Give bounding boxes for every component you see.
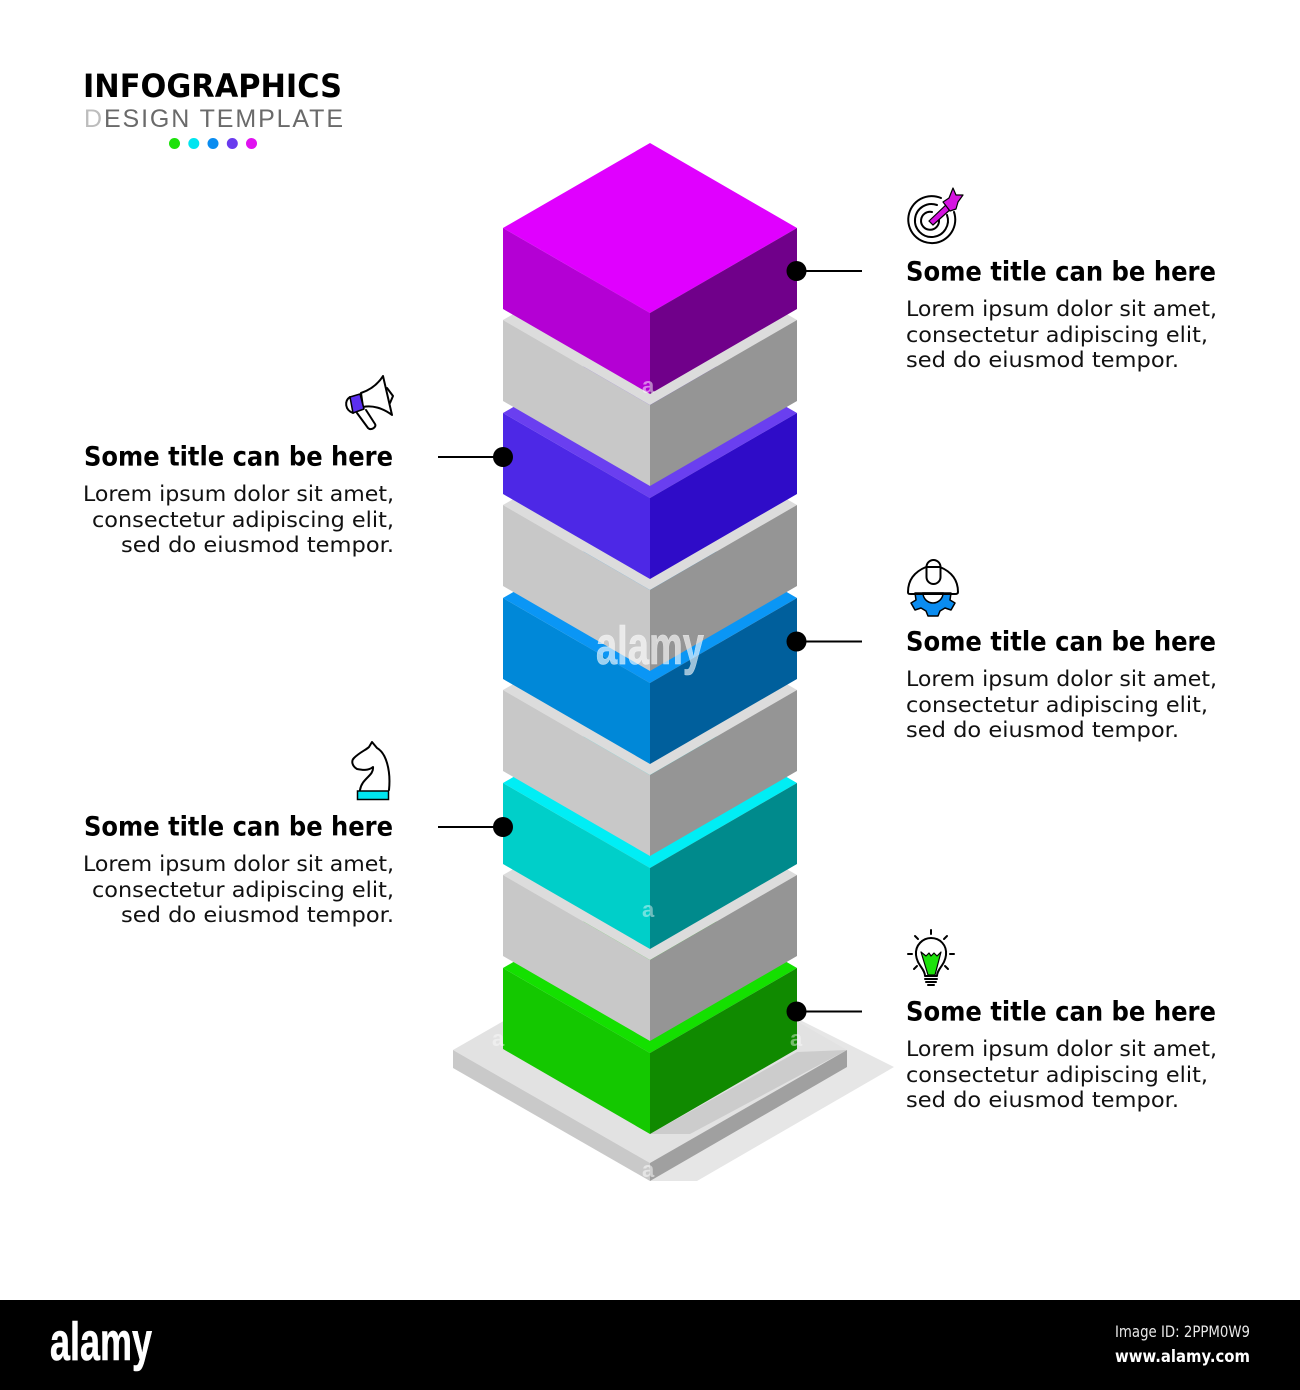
block: grey 3 bbox=[503, 605, 797, 856]
block: magenta bbox=[503, 143, 797, 394]
icon: megaphone bbox=[346, 376, 393, 429]
block: grey 2 bbox=[503, 420, 797, 671]
watermark: a bbox=[642, 373, 655, 398]
heading: infographics design template: INFOGRAPHICS bbox=[83, 67, 342, 105]
watermark: a bbox=[642, 1157, 655, 1182]
connector: upper left bbox=[438, 447, 513, 467]
text block: upper left bbox=[83, 442, 394, 558]
watermark: alamy bbox=[596, 616, 704, 676]
watermark: a bbox=[642, 897, 655, 922]
text block: lower left bbox=[83, 812, 394, 928]
text block: top right bbox=[906, 256, 1217, 373]
watermark: a bbox=[790, 1026, 803, 1051]
text block: middle right: consectetur adipiscing elit, bbox=[906, 693, 1208, 718]
base plate bbox=[453, 937, 847, 1181]
connector: lower left bbox=[438, 817, 513, 837]
footer bar: www.alamy.com bbox=[1115, 1347, 1250, 1367]
text block: top right: Some title can be here bbox=[906, 256, 1216, 288]
icon: target bbox=[908, 188, 963, 243]
text block: bottom right: sed do eiusmod tempor. bbox=[906, 1088, 1179, 1113]
block: grey 4 bbox=[503, 790, 797, 1041]
footer bar: Image ID: 2PPM0W9 bbox=[1115, 1322, 1250, 1341]
text block: bottom right: Some title can be here bbox=[906, 996, 1216, 1028]
text block: middle right: Some title can be here bbox=[906, 626, 1216, 658]
text block: upper left: Lorem ipsum dolor sit amet, bbox=[83, 482, 394, 507]
block: blue bbox=[503, 513, 797, 764]
text block: middle right: sed do eiusmod tempor. bbox=[906, 718, 1179, 743]
icon: helmet with gear bbox=[908, 560, 958, 616]
connector: top right bbox=[786, 261, 862, 281]
text block: top right: sed do eiusmod tempor. bbox=[906, 348, 1179, 373]
text block: bottom right: consectetur adipiscing elit, bbox=[906, 1063, 1208, 1088]
block: teal bbox=[503, 698, 797, 949]
footer bar bbox=[0, 1300, 1300, 1390]
text block: bottom right: Lorem ipsum dolor sit amet, bbox=[906, 1037, 1217, 1062]
watermark: a bbox=[492, 1026, 505, 1051]
text block: lower left: Lorem ipsum dolor sit amet, bbox=[83, 852, 394, 877]
block: green bbox=[503, 883, 797, 1134]
text block: bottom right bbox=[906, 996, 1217, 1113]
icon: chess knight bbox=[352, 742, 389, 800]
isometric tower bbox=[453, 143, 894, 1181]
text block: upper left: Some title can be here bbox=[84, 442, 393, 472]
heading: infographics design template bbox=[83, 67, 343, 149]
text block: middle right bbox=[906, 626, 1217, 743]
icon: light bulb bbox=[908, 930, 954, 985]
text block: top right: consectetur adipiscing elit, bbox=[906, 323, 1208, 348]
text block: upper left: consectetur adipiscing elit, bbox=[92, 508, 394, 533]
text block: lower left: consectetur adipiscing elit, bbox=[92, 878, 394, 903]
text block: middle right: Lorem ipsum dolor sit amet, bbox=[906, 667, 1217, 692]
block: grey 1 bbox=[503, 235, 797, 486]
watermark bbox=[492, 373, 803, 1182]
text block: lower left: sed do eiusmod tempor. bbox=[121, 903, 394, 928]
connector: bottom right bbox=[786, 1002, 862, 1022]
ground shadow bbox=[650, 1020, 894, 1181]
connector: middle right bbox=[786, 632, 862, 652]
text block: upper left: sed do eiusmod tempor. bbox=[121, 533, 394, 558]
block: violet bbox=[503, 328, 797, 579]
footer bar: alamy bbox=[50, 1312, 152, 1372]
text block: lower left: Some title can be here bbox=[84, 812, 393, 842]
text block: top right: Lorem ipsum dolor sit amet, bbox=[906, 297, 1217, 322]
heading: infographics design template: DESIGN TEMPLATE bbox=[84, 105, 343, 133]
